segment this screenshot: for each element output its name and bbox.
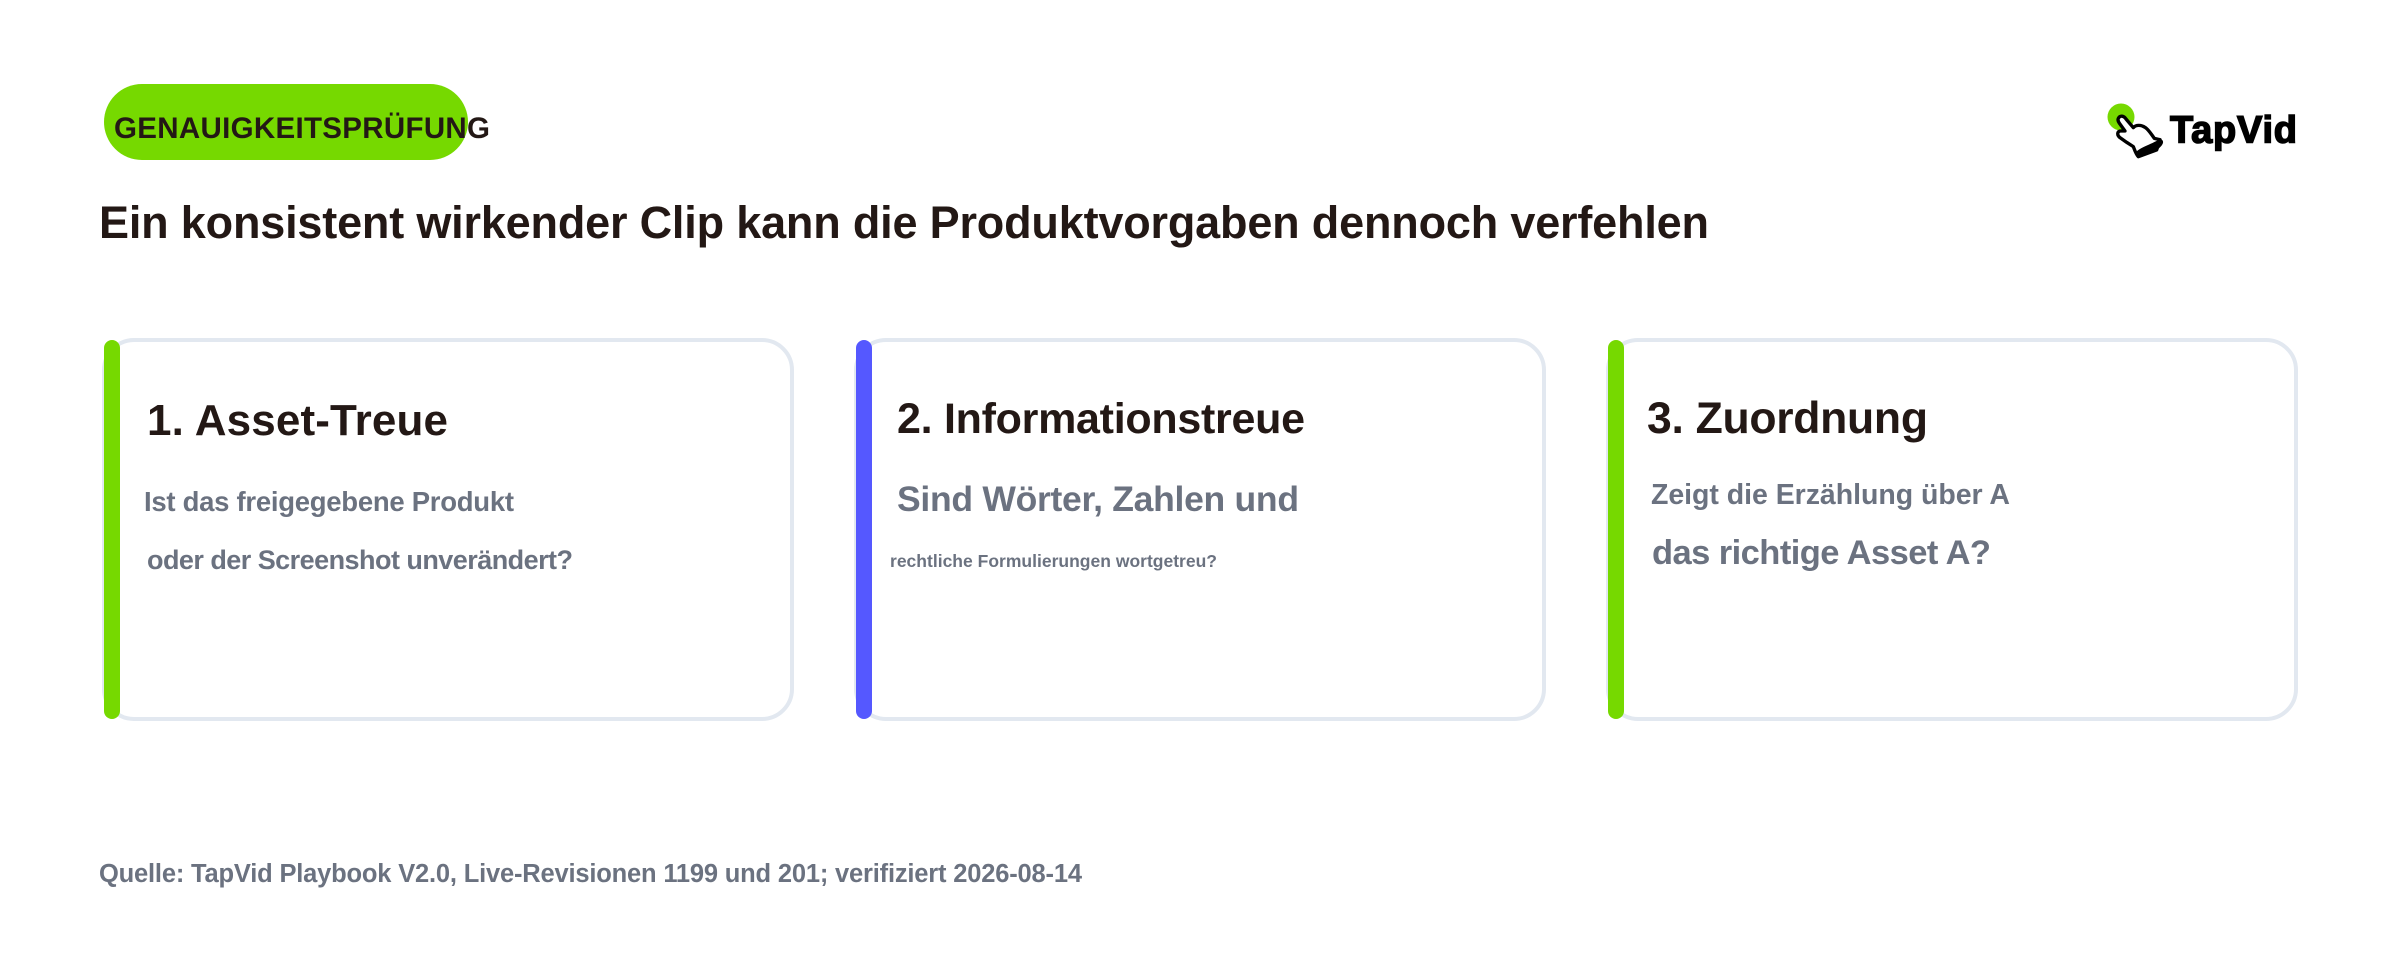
heading: 3. Zuordnung: 3. Zuordnung (1647, 394, 1928, 443)
text block: question 2: Sind Wörter, Zahlen und (897, 479, 1299, 519)
accent bar: green (104, 340, 120, 719)
badge: Genauigkeitsprüfung (104, 84, 490, 160)
panel: Asset-Treue (104, 340, 792, 719)
text block: question 3 (1651, 479, 2010, 572)
panel: Informationstreue (856, 340, 1544, 719)
logo: TapVid (2108, 104, 2297, 157)
accent bar: blue (856, 340, 872, 719)
heading: 2. Informationstreue: 2. Informationstreue (897, 395, 1305, 443)
logo: TapVid: TapVid (2170, 110, 2297, 152)
text block: question 3: das richtige Asset A? (1652, 534, 1991, 572)
heading: 1. Asset-Treue: 1. Asset-Treue (147, 396, 448, 445)
text block: question 1: Ist das freigegebene Produkt (144, 486, 514, 517)
text block: question 2 (890, 479, 1299, 571)
title: Ein konsistent wirkender Clip kann die Produktvorgaben dennoch verfehlen (99, 197, 1709, 248)
badge: Genauigkeitsprüfung: GENAUIGKEITSPRÜFUNG (114, 112, 490, 145)
source note: Quelle: TapVid Playbook V2.0, Live-Revisionen 1199 und 201; verifiziert 2026-08-14 (99, 860, 1083, 888)
text block: question 3: Zeigt die Erzählung über A (1651, 479, 2010, 511)
panel: Zuordnung (1608, 340, 2296, 719)
text block: question 1 (144, 486, 573, 575)
text block: question 1: oder der Screenshot unverändert? (147, 545, 573, 575)
text block: question 2: rechtliche Formulierungen wortgetreu? (890, 551, 1217, 571)
accent bar: green (1608, 340, 1624, 719)
